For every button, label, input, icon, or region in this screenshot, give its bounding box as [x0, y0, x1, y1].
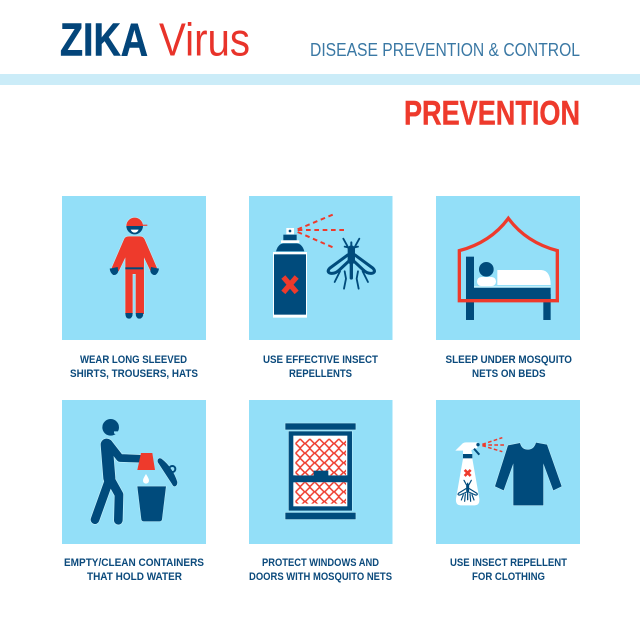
title: ZIKA: [60, 14, 148, 66]
label: bed nets: NETS ON BEDS: [472, 368, 546, 380]
icon: person in long clothes: [110, 218, 159, 319]
icon: bed under mosquito net: [459, 218, 557, 320]
label: clothing repellent: FOR CLOTHING: [472, 571, 545, 583]
label: long sleeves: SHIRTS, TROUSERS, HATS: [70, 368, 198, 380]
section heading: PREVENTION: [404, 94, 580, 132]
icon: spray bottle and shirt: [455, 438, 562, 505]
panel: empty containers: [62, 400, 206, 544]
panel: window nets: [249, 400, 392, 544]
label: insect repellent: REPELLENTS: [289, 368, 352, 380]
title: [60, 14, 250, 66]
label: empty containers: EMPTY/CLEAN CONTAINERS: [64, 557, 204, 569]
label: insect repellent: [263, 354, 378, 380]
icon: spray can and mosquito: [273, 214, 374, 318]
label: bed nets: SLEEP UNDER MOSQUITO: [446, 354, 572, 366]
panel: insect repellent: [249, 196, 392, 340]
panel: clothing repellent: [436, 400, 580, 544]
label: clothing repellent: USE INSECT REPELLENT: [450, 557, 567, 569]
label: empty containers: [64, 557, 204, 583]
subtitle: DISEASE PREVENTION & CONTROL: [310, 40, 580, 60]
header band: [0, 74, 640, 85]
label: clothing repellent: [450, 557, 567, 583]
icon: window with mosquito net: [285, 423, 356, 519]
label: long sleeves: [70, 354, 198, 380]
label: window nets: PROTECT WINDOWS AND: [262, 557, 379, 569]
label: window nets: [249, 557, 392, 583]
label: window nets: DOORS WITH MOSQUITO NETS: [249, 571, 392, 583]
label: bed nets: [446, 354, 572, 380]
title: Virus: [159, 14, 250, 66]
icon: person emptying container: [95, 419, 177, 521]
panel: long sleeves: [62, 196, 206, 340]
label: insect repellent: USE EFFECTIVE INSECT: [263, 354, 378, 366]
label: empty containers: THAT HOLD WATER: [87, 571, 182, 583]
panel: bed nets: [436, 196, 580, 340]
label: long sleeves: WEAR LONG SLEEVED: [80, 354, 187, 366]
